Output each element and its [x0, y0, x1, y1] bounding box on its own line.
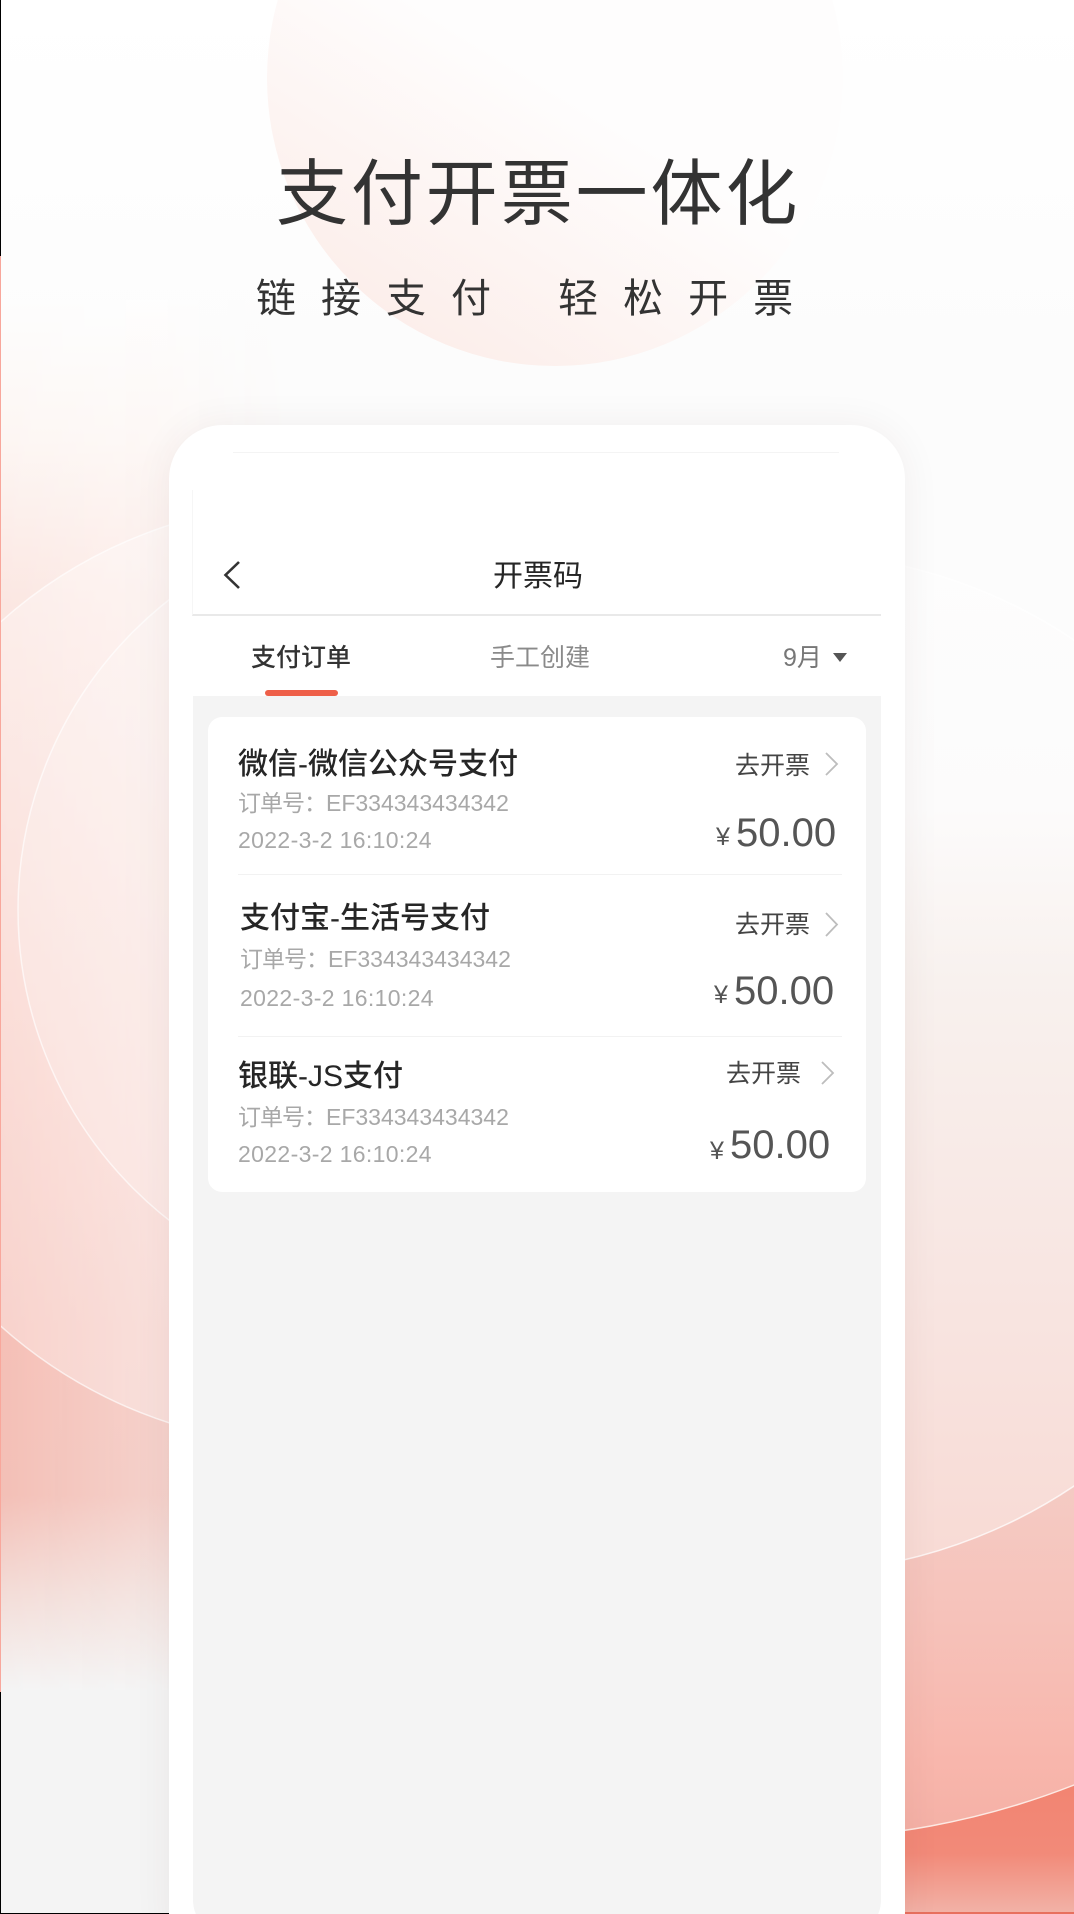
tabs row: [193, 618, 881, 696]
order row: WeChat: 微信-微信公众号支付: [238, 748, 518, 781]
phone mockup: [169, 425, 905, 1914]
nav title: 开票码: [493, 560, 583, 593]
active tab: 支付订单: [251, 644, 351, 672]
order row: UnionPay: 去开票: [726, 1060, 801, 1088]
title: 支付开票一体化: [276, 155, 800, 235]
decorative top circle: [267, 0, 843, 366]
left large circle: [0, 502, 787, 1446]
phone top line: [233, 452, 839, 453]
order row: WeChat: 订单号：EF334343434342: [238, 790, 509, 816]
order row: Alipay: 50.00: [734, 969, 834, 1013]
inactive tab: 手工创建: [490, 644, 590, 672]
order row: UnionPay: 50.00: [730, 1123, 830, 1167]
order row: UnionPay: 银联-JS支付: [238, 1060, 403, 1093]
order row: Alipay: [240, 902, 838, 1013]
right inner circle: [905, 903, 1074, 1560]
right outer circle: [905, 1486, 1074, 1831]
order row: Alipay: 订单号：EF334343434342: [240, 946, 511, 972]
order row: Alipay: 2022-3-2 16:10:24: [240, 985, 434, 1011]
row divider: [238, 874, 842, 875]
order row: UnionPay: 2022-3-2 16:10:24: [238, 1141, 432, 1167]
order row: WeChat: ¥: [716, 823, 730, 851]
screen body: [193, 696, 881, 1914]
order row: WeChat: 50.00: [736, 811, 836, 855]
order list card: [208, 717, 866, 1192]
right bottom corner area: [900, 1750, 1074, 1914]
icon: chevron: [826, 752, 838, 776]
month selector: 9月: [783, 644, 822, 672]
order row: Alipay: ¥: [714, 981, 728, 1009]
app nav bar: [192, 490, 881, 616]
row divider: [238, 1036, 842, 1037]
order row: UnionPay: 订单号：EF334343434342: [238, 1104, 509, 1130]
order row: UnionPay: [238, 1060, 834, 1167]
order row: Alipay: 去开票: [735, 911, 810, 939]
order row: WeChat: 2022-3-2 16:10:24: [238, 827, 432, 853]
icon: chevron: [826, 912, 838, 936]
order row: WeChat: 去开票: [735, 752, 810, 780]
left gradient strip: [1, 425, 170, 1662]
icon: back chevron: [224, 561, 240, 589]
icon: chevron: [822, 1062, 834, 1084]
order row: WeChat: [238, 748, 838, 855]
active tab underline: [265, 690, 338, 696]
order row: Alipay: 支付宝-生活号支付: [240, 902, 490, 935]
icon: dropdown triangle: [833, 653, 847, 662]
left inner circle: [18, 516, 806, 1304]
subtitle: 链接支付 轻松开票: [256, 277, 818, 321]
order row: UnionPay: ¥: [710, 1137, 724, 1165]
